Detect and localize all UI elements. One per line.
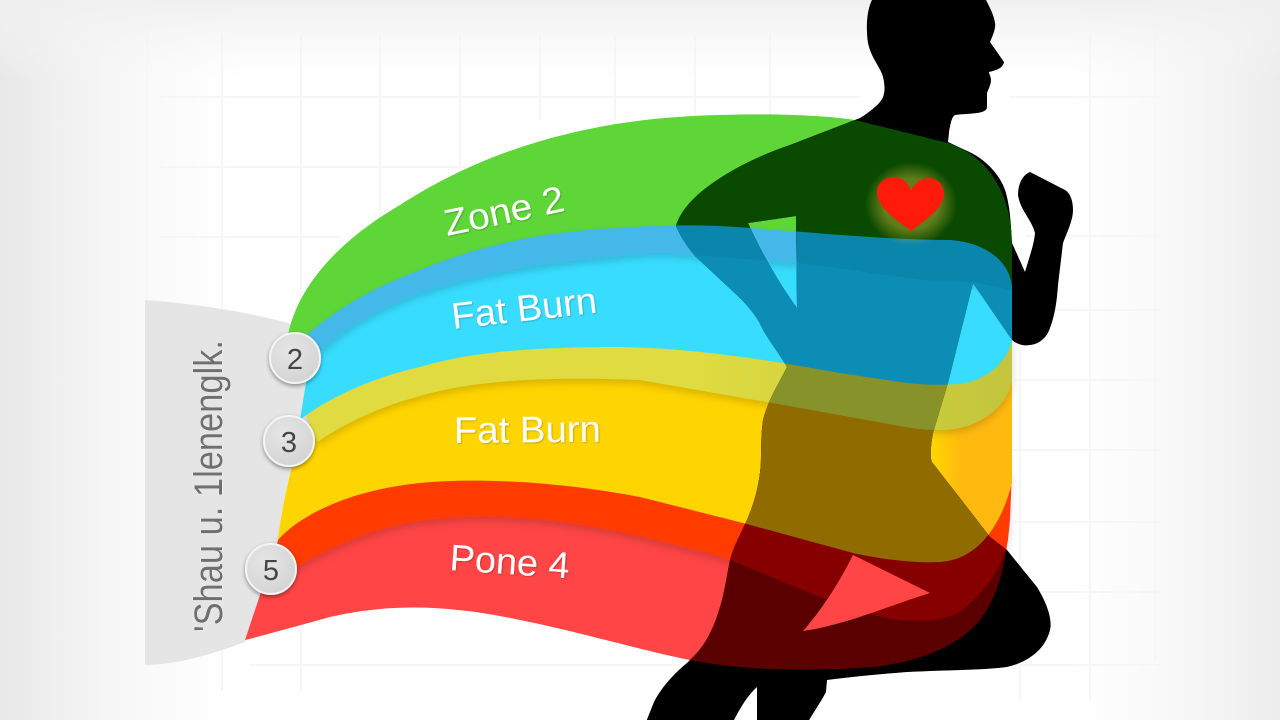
colored zone bands xyxy=(245,114,1012,670)
band: yellow fat burn xyxy=(278,360,1012,562)
label: Fat Burn upper: Fat Burn xyxy=(449,280,599,337)
icon: heart xyxy=(865,162,957,246)
badge 3: 3 xyxy=(281,427,297,459)
darkened band colors within silhouette xyxy=(676,120,1012,670)
silhouette body xyxy=(646,0,1073,720)
label: Zone 4: Pone 4 xyxy=(448,537,571,586)
badge 2 xyxy=(270,333,320,383)
band: blue strip xyxy=(306,225,1012,352)
number badges xyxy=(246,333,320,594)
band: olive strip xyxy=(305,300,1012,442)
label: Fat Burn lower: Fat Burn xyxy=(454,409,601,451)
band: green zone 2 xyxy=(288,114,1012,345)
runner silhouette overlapping the bands xyxy=(646,0,1073,720)
red triangle gap between the legs xyxy=(803,555,930,631)
band: red zone 4 xyxy=(245,440,1012,670)
badge 5 xyxy=(246,544,296,594)
band: red strip xyxy=(272,440,1012,621)
side panel with vertical caption xyxy=(145,300,312,665)
badge 5: 5 xyxy=(263,555,279,587)
label: Zone 2: Zone 2 xyxy=(440,178,568,244)
vertical caption text: 'Shau u. 1lenenglk. xyxy=(187,340,231,632)
band: blue fat burn xyxy=(300,240,1012,420)
zone labels xyxy=(440,178,601,586)
badge 2: 2 xyxy=(287,344,303,376)
badge 3 xyxy=(264,416,314,466)
